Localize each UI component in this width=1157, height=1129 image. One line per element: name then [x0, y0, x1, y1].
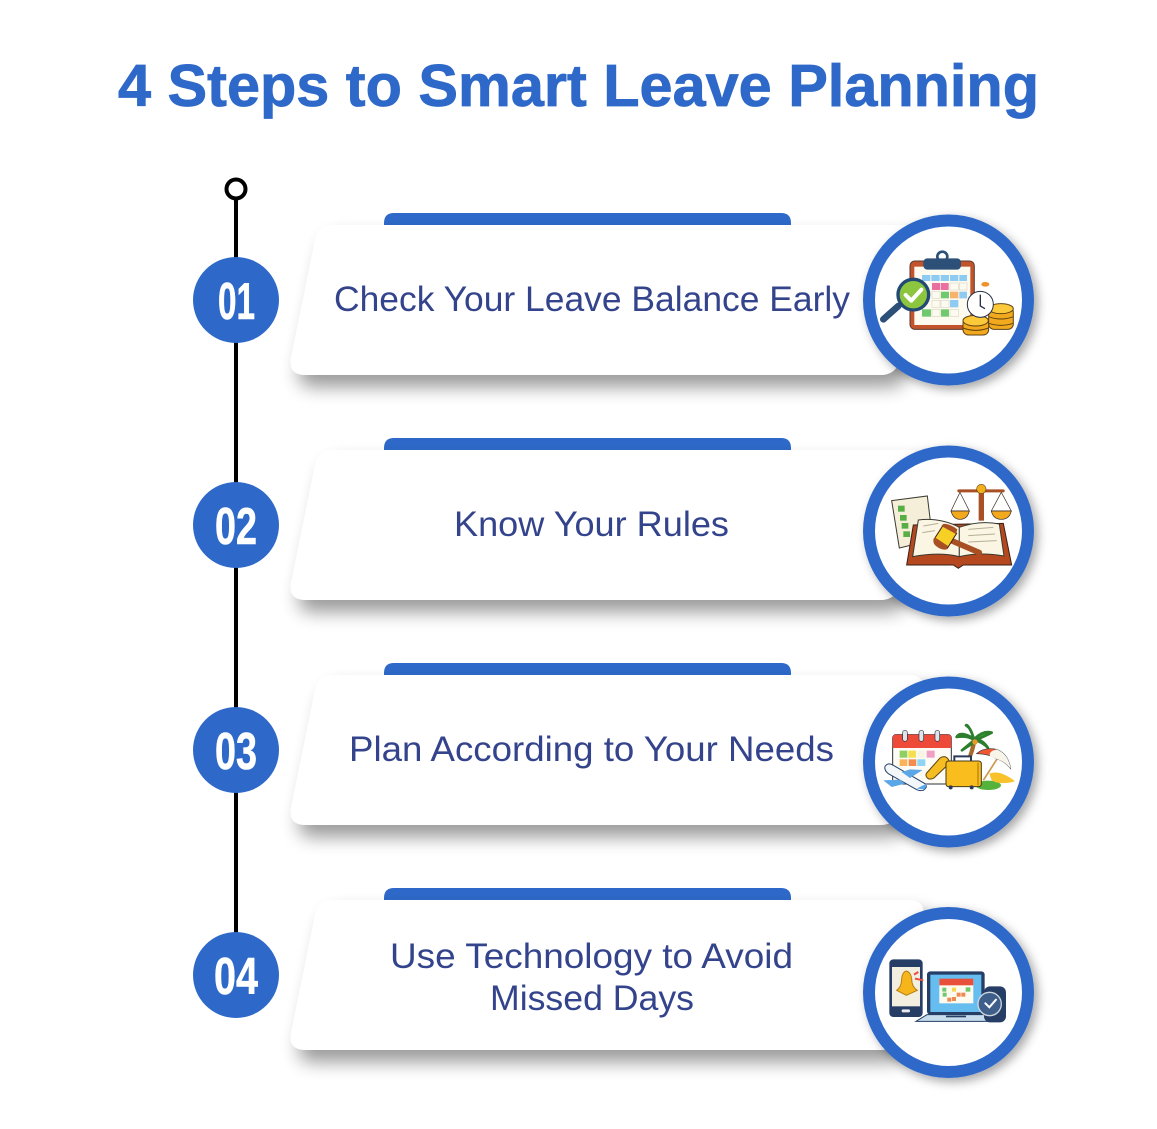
step 4 number badge	[193, 932, 279, 1018]
step 4	[193, 888, 1028, 1072]
step 4 number badge: 04	[214, 948, 258, 1006]
step 2 card	[291, 450, 923, 600]
title: 4 Steps to Smart Leave Planning	[118, 53, 1039, 119]
step 2	[193, 438, 1028, 610]
step 3 accent tab	[384, 663, 791, 676]
step 1 card	[291, 225, 923, 375]
icon: law book, gavel, scales and checklist	[892, 484, 1012, 568]
step 4 card	[291, 900, 923, 1050]
step 4 text: Use Technology to Avoid	[390, 937, 793, 976]
step 4 text	[390, 937, 793, 1018]
step 4 text: Missed Days	[490, 979, 694, 1018]
step 2 accent tab	[384, 438, 791, 451]
icon: calendar clipboard with magnifier, clock and coins	[883, 252, 1013, 335]
step 3 ring	[869, 682, 1028, 842]
step 4 accent tab	[384, 888, 791, 901]
icon: calendar, plane, suitcase, palm and beach umbrella	[883, 725, 1015, 791]
step 1 number badge: 01	[218, 273, 255, 331]
timeline	[226, 180, 246, 975]
step 1	[193, 213, 1028, 380]
step 1 text: Check Your Leave Balance Early	[334, 280, 850, 319]
step 3 text: Plan According to Your Needs	[349, 730, 834, 769]
step 2 ring	[869, 452, 1028, 610]
step 2 number badge: 02	[215, 498, 257, 556]
step 3	[193, 663, 1028, 842]
icon: phone with bell, laptop with calendar and smartwatch	[889, 959, 1006, 1022]
step 2 number badge	[193, 482, 279, 568]
step 4 ring	[869, 913, 1028, 1072]
step 2 text: Know Your Rules	[454, 505, 729, 544]
step 3 number badge: 03	[215, 723, 257, 781]
step 3 card	[291, 675, 923, 825]
step 3 number badge	[193, 707, 279, 793]
step 1 accent tab	[384, 213, 791, 226]
step 1 ring	[869, 220, 1028, 380]
step 1 number badge	[193, 257, 279, 343]
